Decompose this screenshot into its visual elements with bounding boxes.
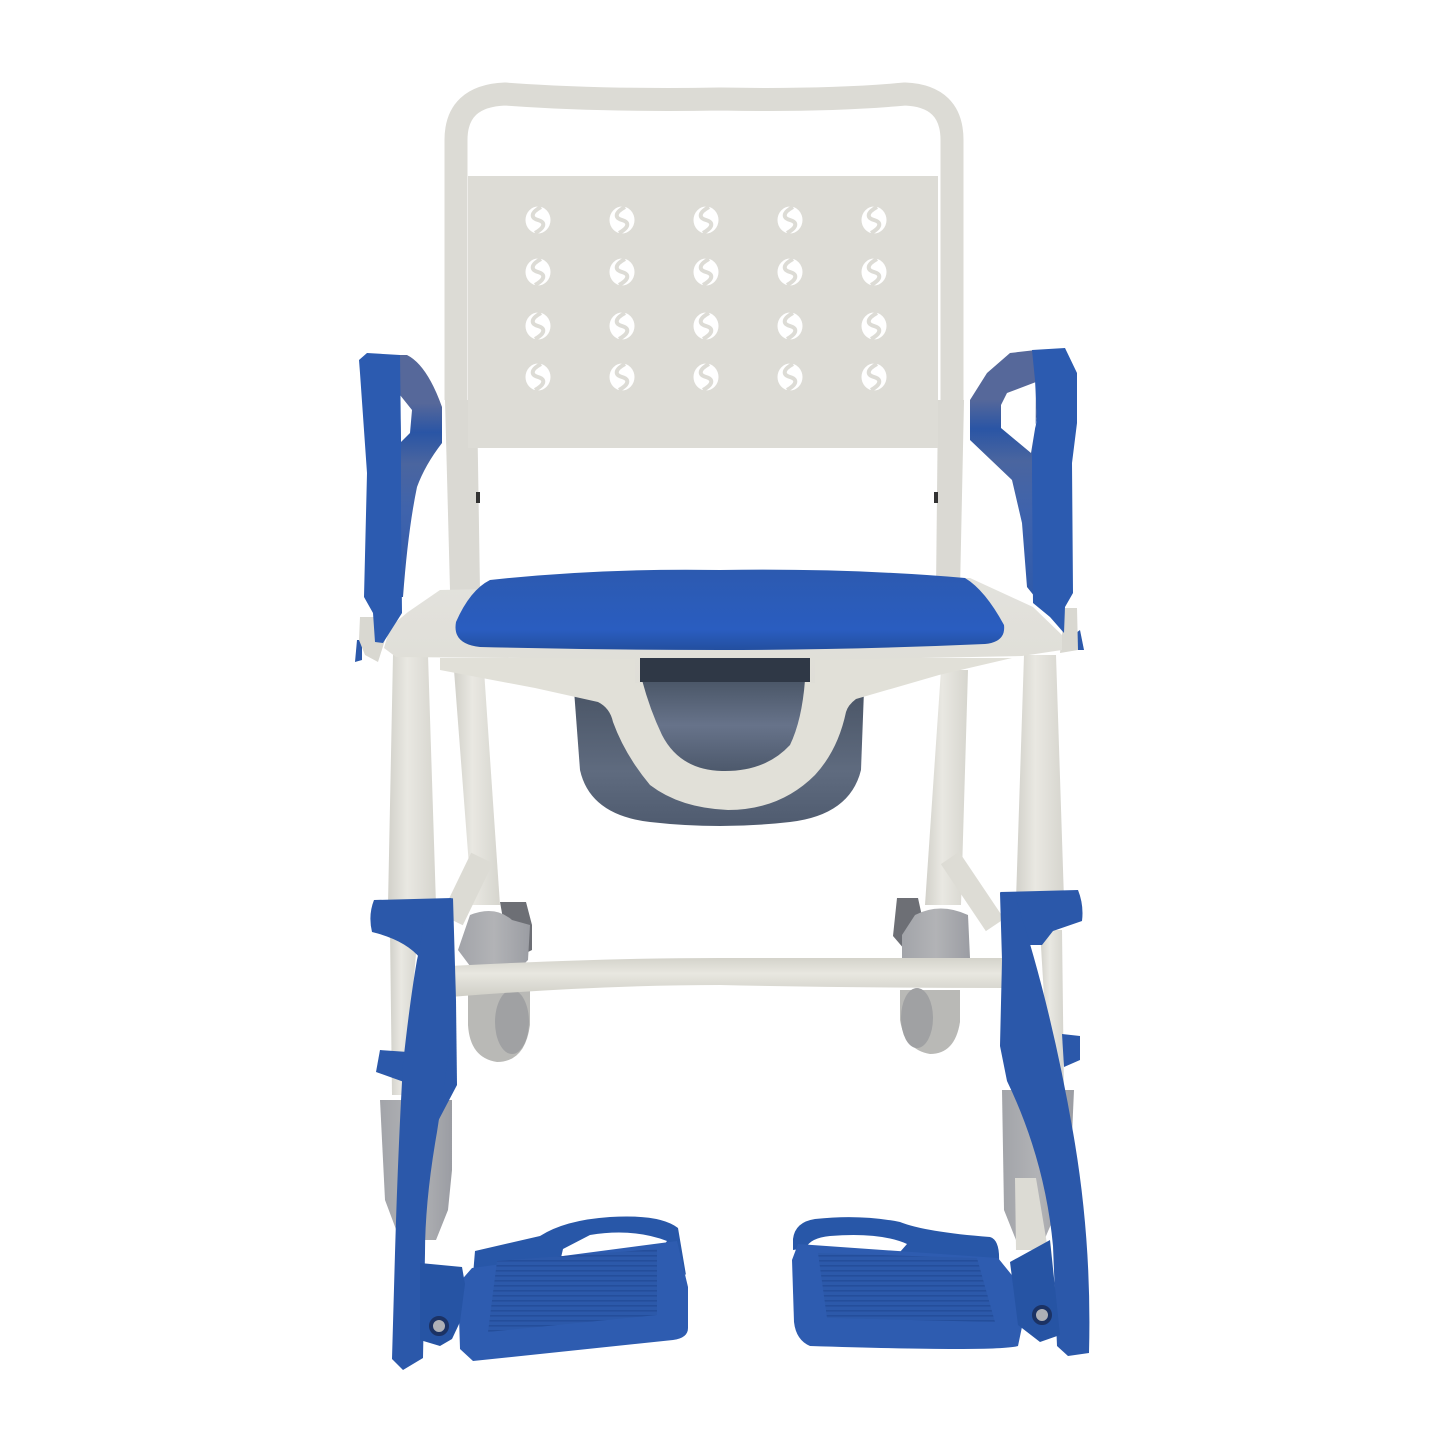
right hinge bracket	[1010, 1240, 1060, 1342]
right pivot bolt	[1034, 1307, 1050, 1323]
right lower collar	[1062, 1034, 1080, 1067]
left footplate	[420, 1216, 688, 1361]
left front leg	[388, 655, 436, 905]
right armrest grip	[970, 350, 1037, 597]
right armrest	[970, 348, 1077, 633]
right main bar	[1000, 893, 1089, 1356]
right footplate	[792, 1217, 1060, 1349]
left back panel	[436, 1000, 457, 1125]
right armrest strip	[1032, 348, 1077, 633]
right tread ribs	[818, 1253, 995, 1322]
left frame lower tube	[445, 400, 480, 590]
left lower collar	[376, 1050, 408, 1082]
right footrest arm	[1000, 890, 1089, 1356]
backrest panel	[468, 176, 938, 448]
right rear caster	[893, 898, 970, 1054]
right armrest blue tip	[1076, 630, 1084, 650]
bucket opening	[642, 680, 805, 771]
left armrest clip	[359, 617, 385, 662]
right brace	[950, 858, 995, 925]
right grey hinge	[1002, 1090, 1074, 1250]
left footrest arm	[370, 898, 457, 1370]
left armrest grip	[395, 355, 442, 597]
right upper collar	[1000, 890, 1082, 945]
left plate	[458, 1241, 688, 1361]
left armrest strip	[359, 353, 402, 643]
ventilation holes	[526, 206, 886, 390]
front crossbar	[450, 958, 1005, 997]
left pin	[476, 492, 480, 503]
right pin	[934, 492, 938, 503]
right lower tube	[1040, 930, 1064, 1095]
bucket	[574, 690, 864, 826]
right armrest clip	[1060, 608, 1078, 653]
left fork	[458, 911, 530, 968]
left brace	[452, 858, 482, 920]
right rear leg	[925, 670, 968, 905]
left grey hinge	[380, 1100, 452, 1240]
bucket slot cover	[640, 648, 810, 682]
left rear caster	[458, 902, 532, 1062]
left lower tube	[390, 930, 418, 1095]
back frame	[456, 94, 952, 400]
right strap	[793, 1217, 999, 1262]
bucket holder	[440, 658, 1012, 810]
left hinge bracket	[420, 1263, 465, 1346]
right brake	[893, 898, 925, 950]
right frame lower tube	[936, 400, 964, 590]
right fork	[902, 908, 970, 960]
left wheel	[468, 990, 530, 1062]
right plate	[792, 1244, 1023, 1349]
left pivot bolt	[431, 1318, 447, 1334]
left upper collar	[370, 898, 452, 960]
left strap	[473, 1216, 686, 1275]
right wheel	[900, 990, 960, 1054]
left armrest	[359, 353, 442, 643]
right front leg	[1016, 655, 1064, 900]
left tread ribs	[488, 1249, 657, 1332]
left armrest blue tip	[355, 640, 362, 662]
seat pad	[456, 570, 1004, 650]
left brake	[500, 902, 532, 956]
left rear leg	[454, 670, 500, 905]
seat plate	[384, 578, 1062, 683]
left main bar	[392, 898, 456, 1370]
right tube above footplate	[1015, 1178, 1048, 1250]
